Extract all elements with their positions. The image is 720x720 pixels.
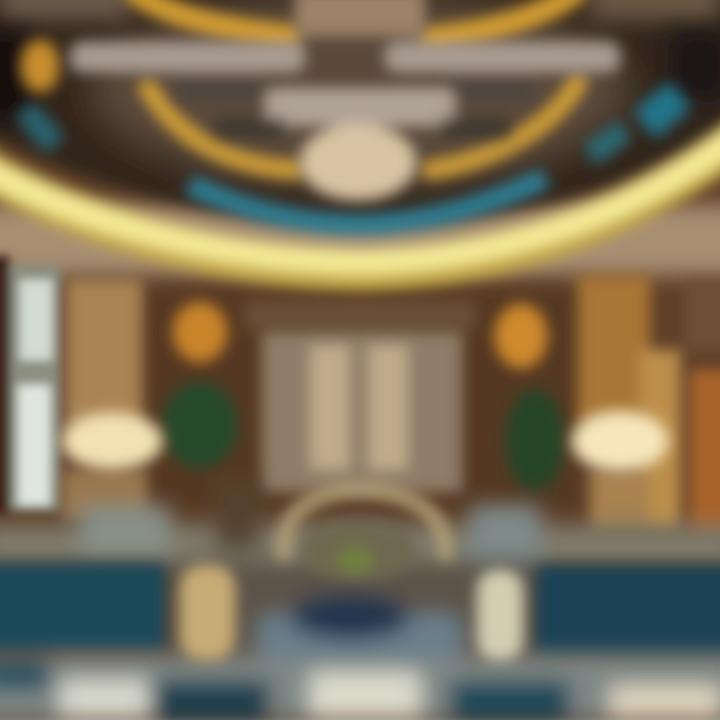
ceiling: dark recess [0, 0, 720, 228]
left sofa [0, 562, 166, 652]
central table [284, 490, 445, 582]
chandelier [70, 0, 620, 200]
ceiling: teal rim [25, 95, 680, 225]
table lamps [62, 411, 668, 471]
vases [180, 565, 523, 660]
ceiling: lower yellow arcs [148, 82, 578, 170]
wood columns [62, 275, 720, 535]
right sofa [535, 564, 720, 658]
back wall: central panel [245, 300, 475, 492]
ceiling: upper yellow arcs [21, 0, 575, 92]
plants [162, 381, 565, 492]
pendant lamps [173, 302, 547, 368]
cove light: yellow arc [0, 118, 720, 270]
lounge centre: pale seating area [0, 480, 720, 660]
left window column [0, 255, 60, 515]
floor [0, 596, 720, 720]
